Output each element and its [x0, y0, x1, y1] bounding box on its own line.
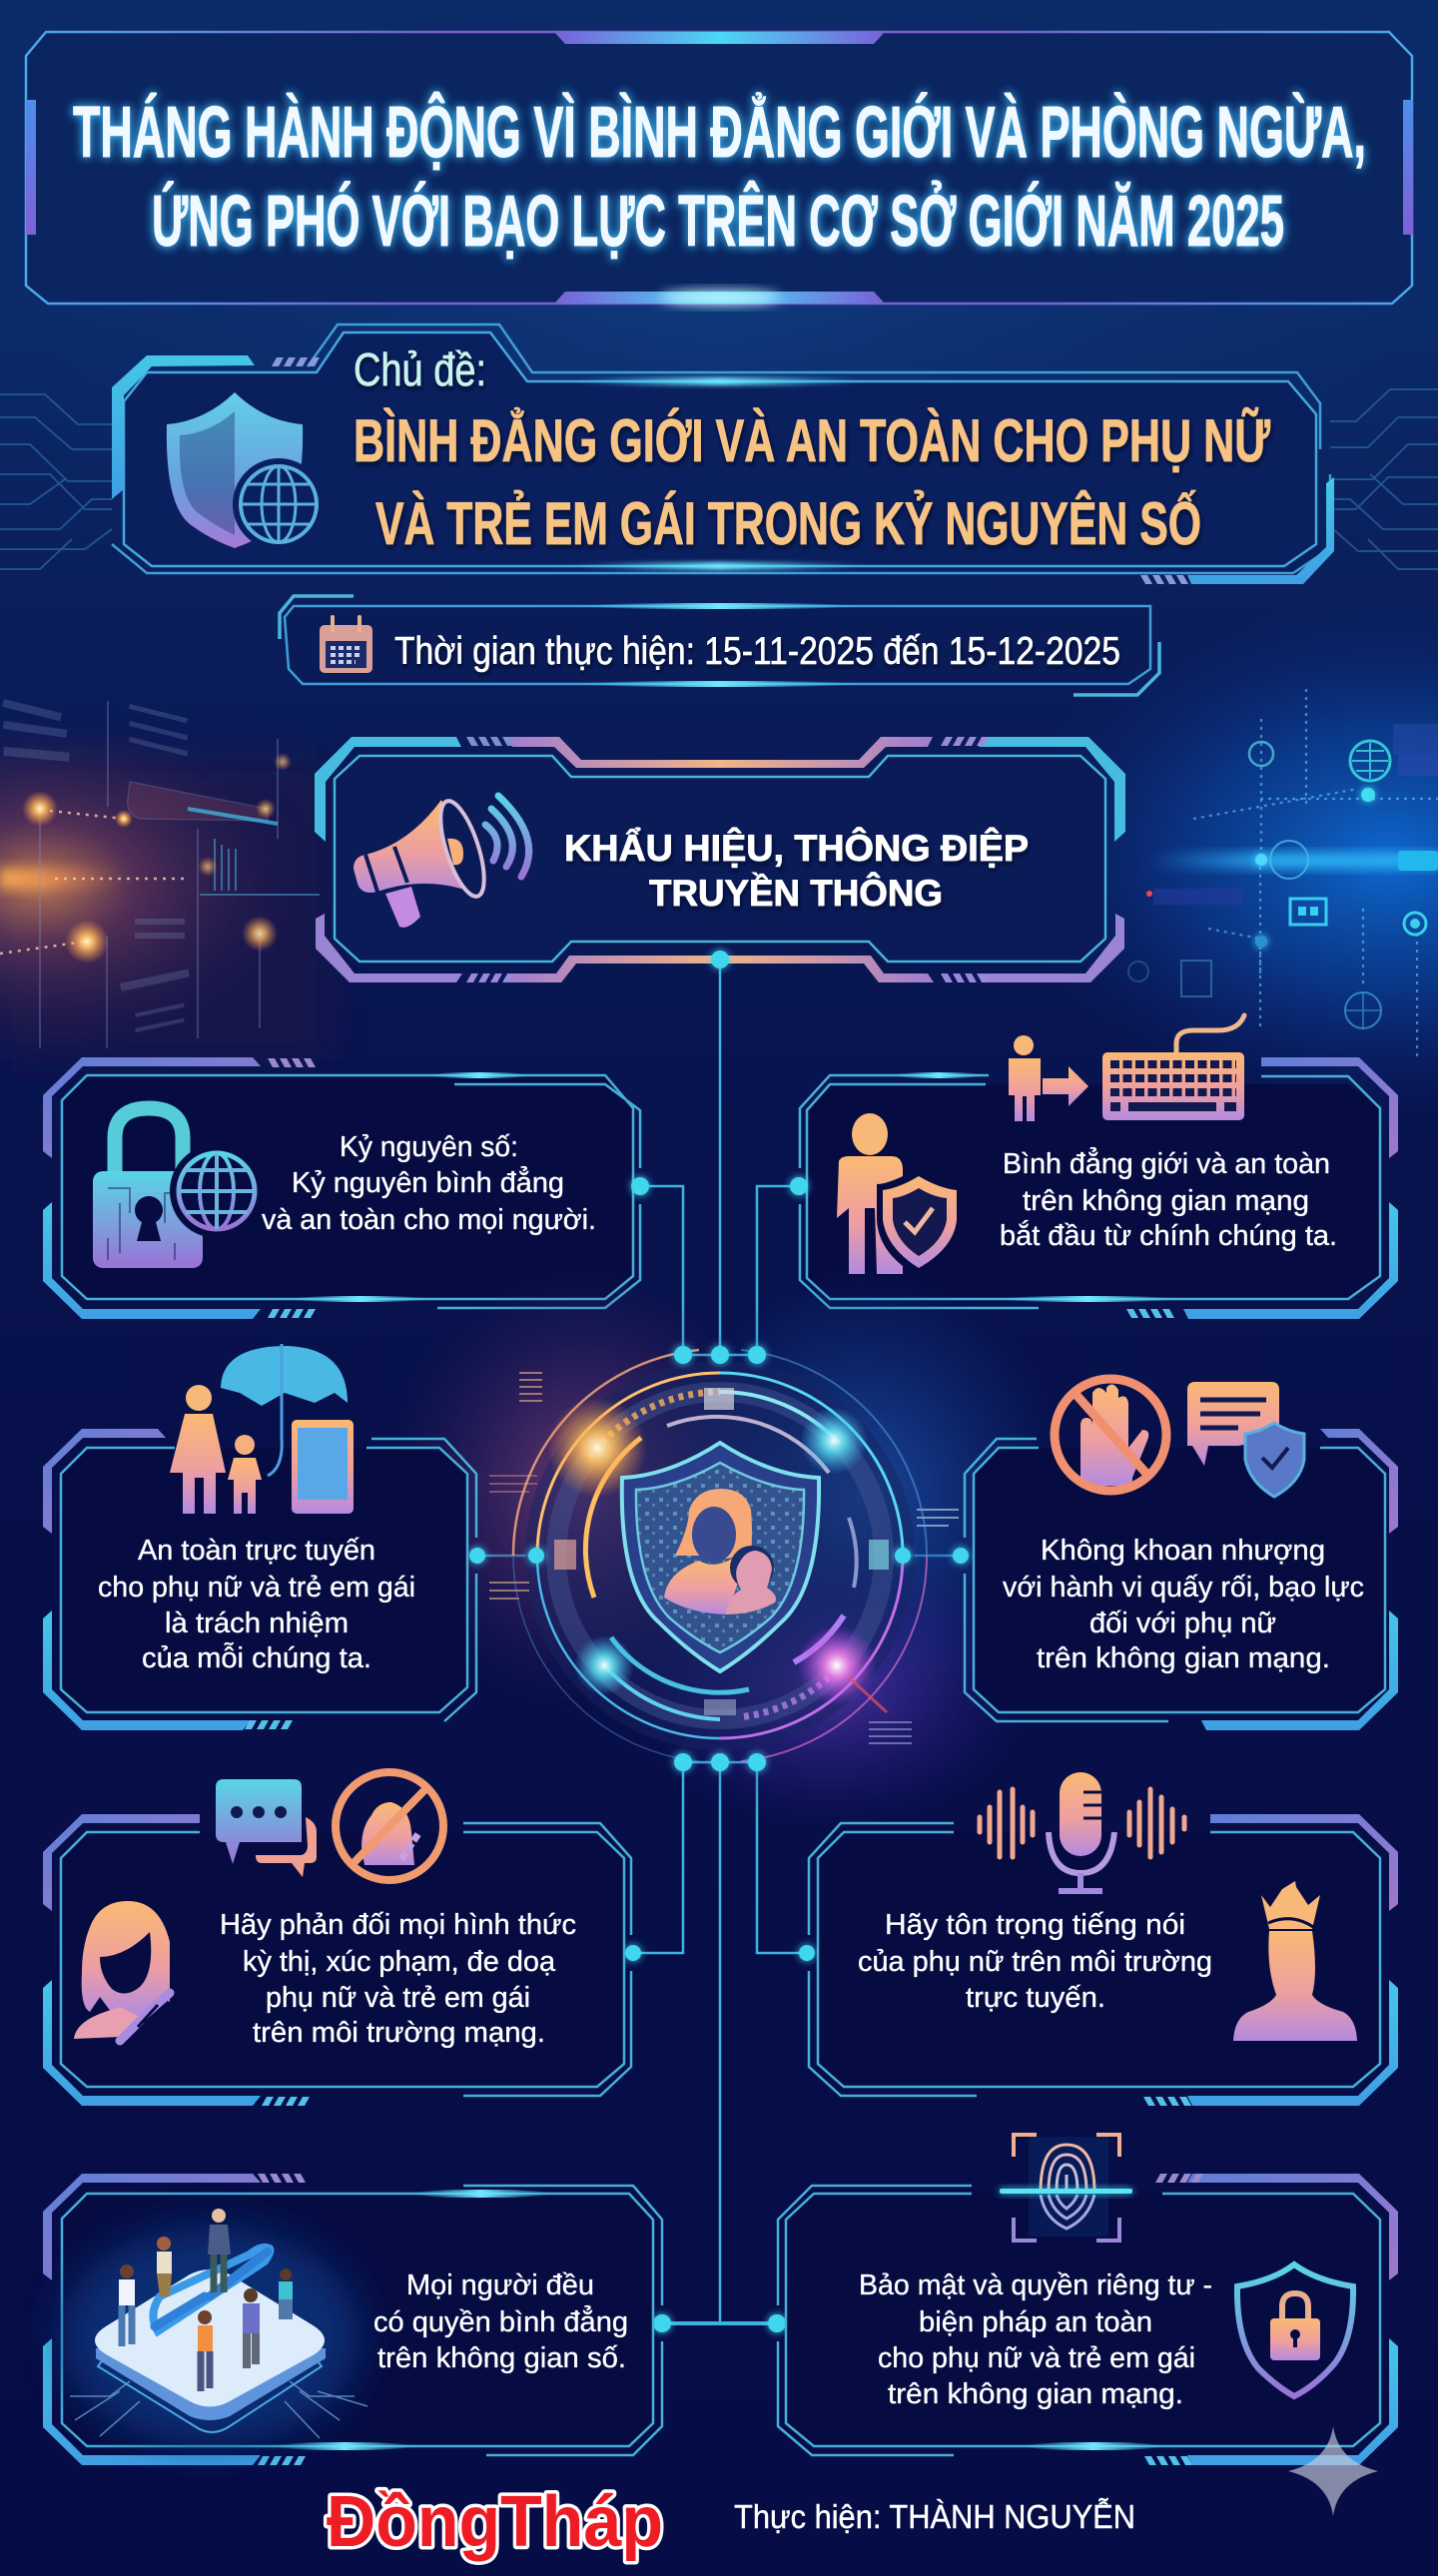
text: Kỷ nguyên bình đẳng	[292, 1165, 564, 1199]
sparkle watermark	[1288, 2426, 1378, 2516]
text: trên không gian số.	[377, 2342, 626, 2374]
icon: chat with shield	[1187, 1382, 1304, 1497]
connector lines	[477, 960, 961, 2323]
text: Hãy tôn trọng tiếng nói	[885, 1909, 1185, 1941]
theme label: Chủ đề:	[354, 343, 486, 395]
heading text: TRUYỀN THÔNG	[649, 872, 943, 914]
text: trực tuyến.	[966, 1982, 1105, 2014]
date text: Thời gian thực hiện: 15-11-2025 đến 15-12-2025	[394, 630, 1120, 673]
icon: silenced woman with chain	[74, 1901, 170, 2041]
text: trên môi trường mạng.	[253, 2017, 545, 2049]
panel: message 6	[809, 1772, 1398, 2106]
text	[98, 1535, 415, 1674]
text: An toàn trực tuyến	[138, 1535, 375, 1567]
heading text	[564, 827, 1029, 914]
text	[1003, 1535, 1364, 1674]
icon: fingerprint scan	[1000, 2135, 1132, 2241]
text: Bảo mật và quyền riêng tư -	[859, 2269, 1212, 2301]
icon: shield with globe	[167, 392, 325, 550]
text: cho phụ nữ và trẻ em gái	[878, 2342, 1195, 2374]
icon: prohibited hand	[1055, 1379, 1166, 1491]
text	[859, 2269, 1212, 2410]
icon: prohibited abuse	[336, 1772, 443, 1880]
text	[220, 1909, 576, 2049]
text: của phụ nữ trên môi trường	[858, 1946, 1212, 1978]
node dots	[469, 951, 969, 2332]
slogan panel frame	[315, 737, 1125, 982]
panel: message 3	[43, 1344, 476, 1730]
icon: padlock with globe	[93, 1108, 264, 1268]
text: với hành vi quấy rối, bạo lực	[1003, 1572, 1364, 1604]
icon: woman with crown	[1233, 1881, 1357, 2041]
text: Kỷ nguyên số:	[340, 1131, 518, 1163]
panel: message 2	[800, 1015, 1398, 1319]
text	[262, 1131, 596, 1236]
person figures	[119, 2209, 293, 2391]
text: trên không gian mạng.	[888, 2378, 1183, 2410]
text: Hãy phản đối mọi hình thức	[220, 1909, 576, 1941]
icon: person with shield	[837, 1113, 963, 1274]
heading text: KHẨU HIỆU, THÔNG ĐIỆP	[564, 827, 1029, 869]
text: có quyền bình đẳng	[373, 2304, 628, 2338]
text: Mọi người đều	[406, 2269, 594, 2301]
text: cho phụ nữ và trẻ em gái	[98, 1572, 415, 1604]
panel: theme	[112, 324, 1334, 584]
text	[858, 1909, 1212, 2014]
panel: date	[280, 596, 1159, 695]
emblem rings	[513, 1350, 927, 1761]
illustration: people linked on a platform	[60, 2209, 367, 2446]
icon: chat bubbles	[216, 1779, 317, 1877]
text: và an toàn cho mọi người.	[262, 1204, 596, 1236]
background: left tech scene	[0, 699, 330, 1058]
background: circuit traces beside subject panel	[0, 389, 1438, 569]
title panel	[26, 32, 1413, 305]
text: bắt đầu từ chính chúng ta.	[1000, 1219, 1337, 1252]
text: phụ nữ và trẻ em gái	[266, 1982, 530, 2014]
emblem flares	[547, 1398, 887, 1712]
center emblem	[419, 1286, 1036, 1810]
panel: message 7	[43, 2174, 662, 2465]
text: của mỗi chúng ta.	[142, 1641, 371, 1674]
icon: family under umbrella with tablet	[170, 1344, 354, 1514]
icon: microphone with sound waves	[980, 1772, 1184, 1891]
panel: message 4	[965, 1379, 1398, 1730]
text: kỳ thị, xúc phạm, đe doạ	[243, 1946, 556, 1978]
emblem data blocks	[489, 1373, 959, 1743]
icon: person, arrow, keyboard	[1009, 1015, 1244, 1121]
icon: calendar	[320, 617, 372, 673]
text: biện pháp an toàn	[919, 2306, 1152, 2338]
text: trên không gian mạng.	[1037, 1642, 1330, 1674]
title text	[73, 92, 1366, 262]
icon: shield with padlock	[1237, 2264, 1353, 2396]
logo: ĐồngTháp	[327, 2482, 663, 2562]
text: Bình đẳng giới và an toàn	[1003, 1146, 1330, 1180]
panel: message 5	[43, 1772, 631, 2106]
credit: Thực hiện: THÀNH NGUYỄN	[734, 2498, 1135, 2535]
text	[373, 2269, 628, 2374]
text	[1000, 1146, 1337, 1252]
text: Không khoan nhượng	[1041, 1535, 1325, 1567]
theme text	[354, 407, 1270, 557]
panel: slogan heading	[315, 737, 1125, 982]
shield	[619, 1443, 819, 1671]
icon: megaphone	[354, 796, 529, 928]
woman and child figure	[664, 1489, 776, 1614]
theme panel frame	[112, 324, 1334, 584]
panel: message 8	[778, 2135, 1398, 2465]
text: là trách nhiệm	[165, 1608, 349, 1639]
text: trên không gian mạng	[1023, 1185, 1309, 1217]
title panel accents	[26, 32, 1413, 305]
background: right tech scene	[1009, 599, 1438, 1118]
panel: message 1	[43, 1057, 640, 1319]
text: đối với phụ nữ	[1089, 1608, 1276, 1639]
